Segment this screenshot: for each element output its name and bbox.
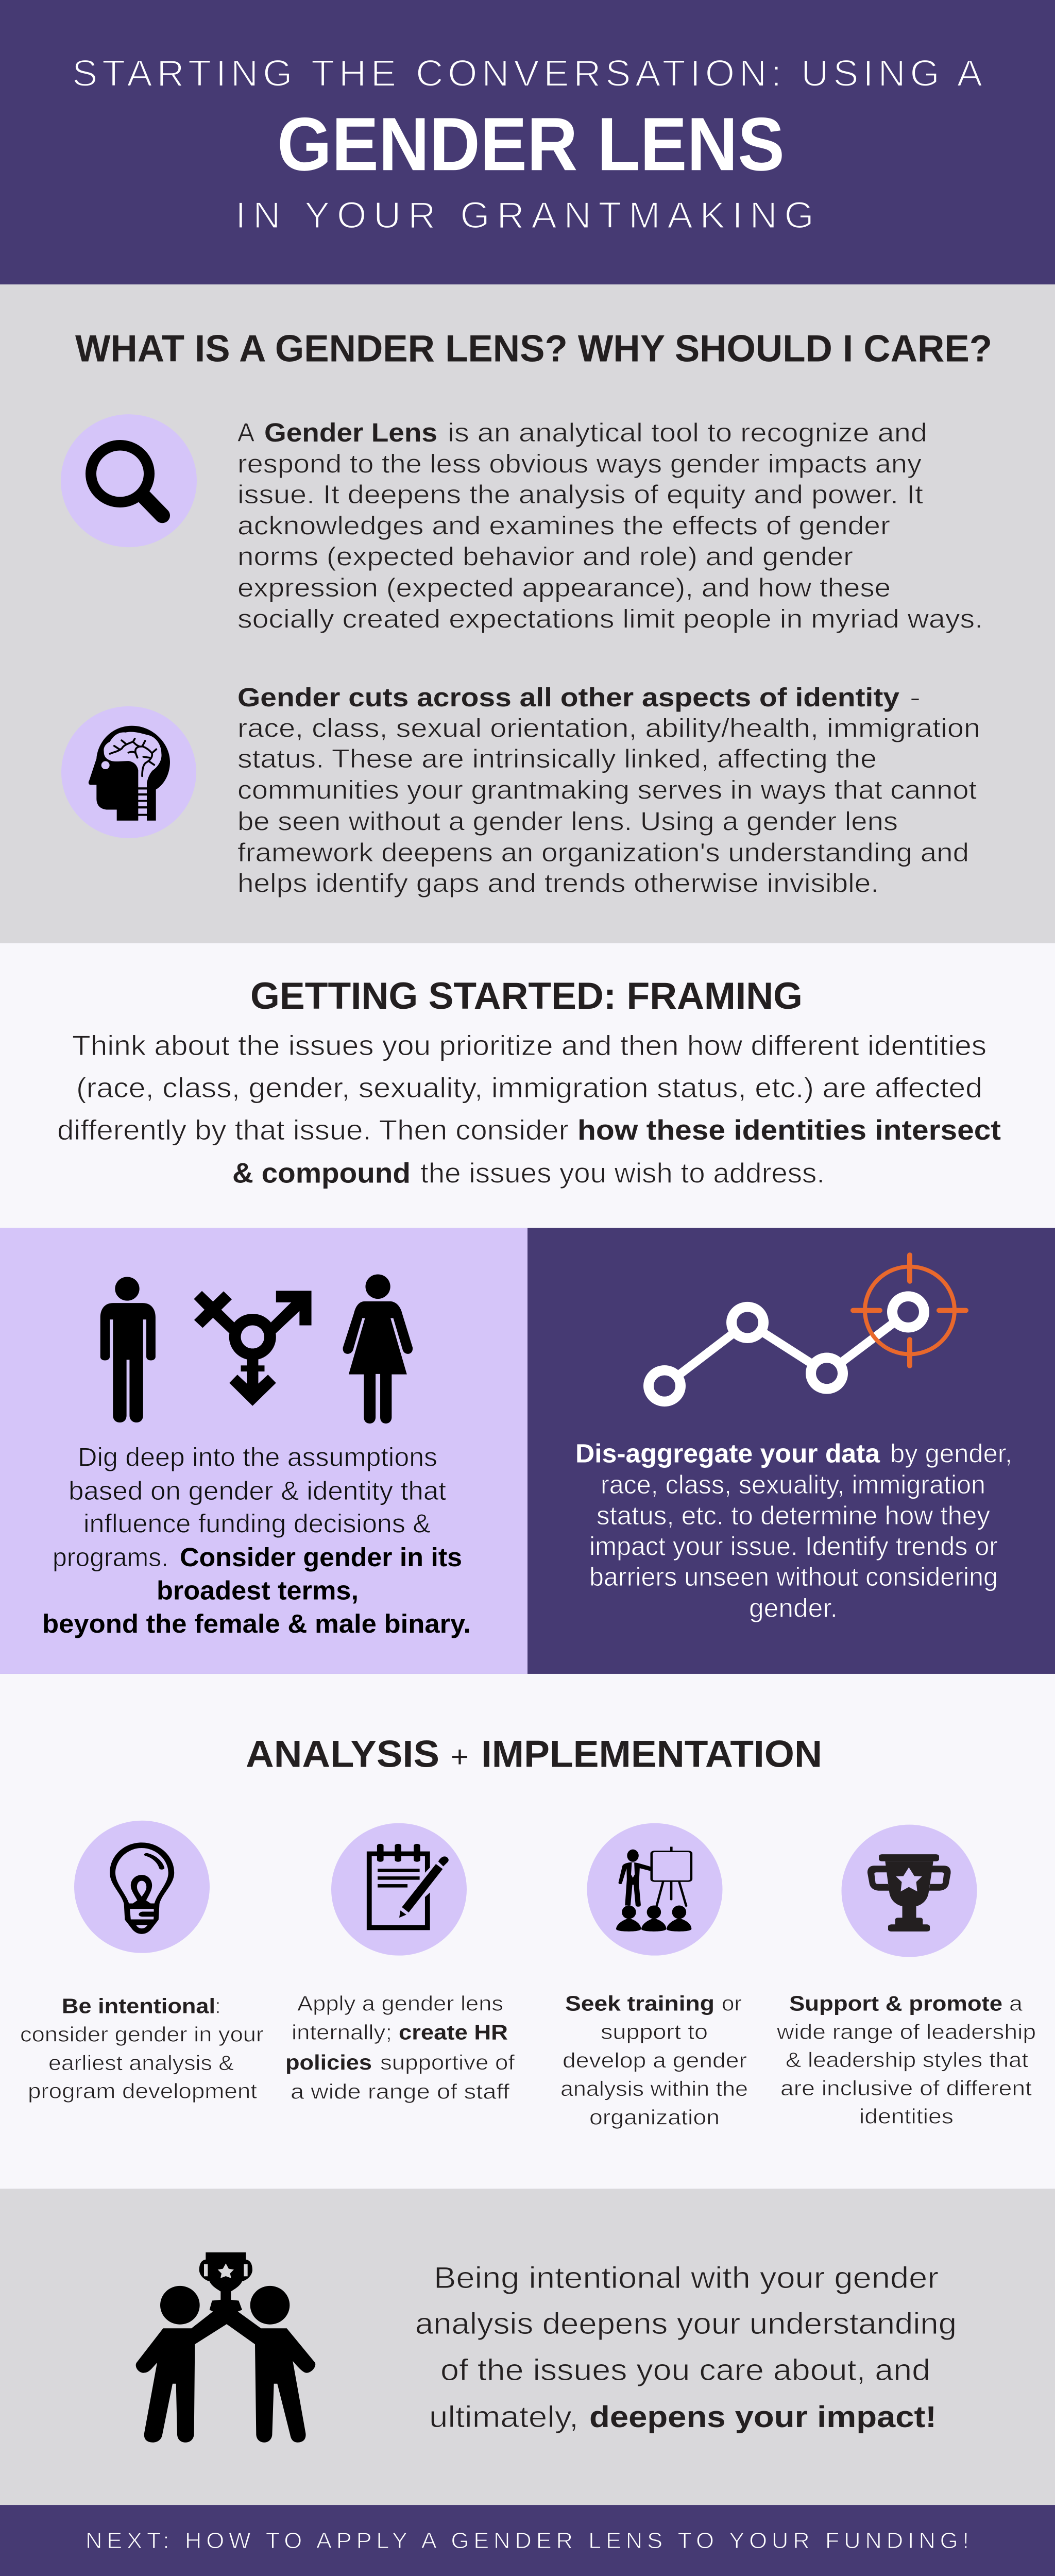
text block: seek training: organization [589,2105,720,2129]
text block: gender cuts across identity: race, class, sexual orientation, ability/health, immigration [237,713,980,742]
text block: dig deep into assumptions: based on gender & identity that [69,1476,446,1505]
text block: gender lens definition: issue. It deepens the analysis of equity and power. It [237,480,923,509]
text block: closing message: deepens your impact! [589,2399,937,2434]
text block: gender cuts across identity: Gender cuts across all other aspects of identity [237,682,899,712]
text block: dig deep into assumptions: beyond the female & male binary. [42,1608,471,1638]
text block: dig deep into assumptions: programs. [53,1542,168,1572]
text block: gender lens definition: is an analytical tool to recognize and [448,417,927,447]
text block: closing message: ultimately, [429,2399,578,2434]
panel: consider gender identity [0,1228,528,1674]
heading: analysis + implementation [246,1733,822,1775]
title line 3: IN YOUR GRANTMAKING [235,194,814,236]
text block: dis-aggregate data: impact your issue. Identify trends or [589,1531,998,1561]
icon: man, transgender symbol and woman [100,1274,413,1423]
text block: dig deep into assumptions: Dig deep into the assumptions [78,1442,437,1471]
panel: analysis and implementation [0,1674,1055,2189]
footer text: NEXT: HOW TO APPLY A GENDER LENS TO YOUR FUNDING! [86,2529,969,2553]
text block: gender cuts across identity [237,682,980,897]
text block: dis-aggregate data [575,1438,1012,1622]
text block: closing message: analysis deepens your understanding [415,2307,957,2341]
text block: framing guidance: differently by that issue. Then consider [57,1114,569,1146]
text block: gender lens definition: socially created expectations limit people in myriad ways. [237,604,983,633]
text block: support and promote: Support & promote [789,1991,1002,2015]
text block: be intentional: earliest analysis & [48,2050,234,2075]
text block: gender cuts across identity: helps identify gaps and trends otherwise invisible. [237,868,879,897]
text block: framing guidance: how these identities intersect [577,1114,1001,1146]
icon: trophy with star [842,1825,977,1957]
icon: light bulb [74,1821,210,1953]
text block: support and promote: wide range of leadership [776,2020,1036,2043]
panel: what is a gender lens [0,284,1055,943]
text block: seek training: develop a gender [563,2048,747,2072]
text block: gender lens definition [237,417,983,633]
text block: create hr policies: create HR [399,2020,508,2044]
text block: gender cuts across identity: communities your grantmaking serves in ways that cannot [237,775,977,805]
icon: head with brain [61,706,196,838]
text block: gender lens definition: respond to the less obvious ways gender impacts any [237,449,922,478]
text block: be intentional: program development [28,2079,257,2103]
text block: dis-aggregate data: status, etc. to determine how they [597,1500,990,1530]
text block: support and promote: a [1009,1991,1023,2015]
text block: gender cuts across identity: framework deepens an organization's understanding and [237,837,969,867]
text block: create hr policies: a wide range of staff [291,2079,510,2104]
text block: dig deep into assumptions: broadest terms, [157,1575,359,1605]
text block: dis-aggregate data: barriers unseen without considering [589,1562,998,1591]
text block: closing message: Being intentional with your gender [434,2261,939,2295]
panel: dis-aggregate your data [528,1228,1055,1674]
text block: gender lens definition: acknowledges and examines the effects of gender [237,511,890,540]
text block: seek training: or [722,1991,742,2015]
heading: getting started: GETTING STARTED: FRAMING [250,975,803,1017]
text block: framing guidance: the issues you wish to address. [420,1157,825,1189]
text block: dis-aggregate data: by gender, [890,1438,1012,1468]
text block: framing guidance: Think about the issues you prioritize and then how different identities [72,1030,986,1061]
text block: gender lens definition: norms (expected behavior and role) and gender [237,541,853,571]
icon: line chart with target [649,1255,966,1401]
heading: what is a gender lens: WHAT IS A GENDER LENS? WHY SHOULD I CARE? [75,327,992,369]
icon: notepad and pencil [331,1823,467,1956]
text block: framing guidance [57,1030,1001,1189]
icon: two people holding trophy [136,2252,315,2443]
text block: seek training: Seek training [565,1991,714,2015]
text block: dig deep into assumptions [42,1442,471,1638]
text block: support and promote [776,1991,1036,2128]
text block: dig deep into assumptions: influence funding decisions & [83,1509,431,1538]
text block: be intentional: Be intentional [62,1994,215,2018]
text block: create hr policies: policies [285,2050,372,2074]
text block: dis-aggregate data: Dis-aggregate your data [575,1438,880,1468]
text block: support and promote: are inclusive of different [780,2076,1032,2100]
icon: magnifying glass [61,414,197,547]
text block: seek training: analysis within the [560,2076,748,2100]
text block: create hr policies: internally; [292,2020,392,2044]
text block: gender cuts across identity: status. These are intrinsically linked, affecting the [237,744,877,773]
text block: be intentional [20,1994,264,2103]
title line 1: STARTING THE CONVERSATION: USING A [72,53,982,94]
text block: gender cuts across identity: be seen without a gender lens. Using a gender lens [237,806,898,836]
text block: create hr policies [285,1991,515,2104]
panel: deepens your impact [0,2189,1055,2505]
title main: gender lens: GENDER LENS [277,103,785,187]
text block: dis-aggregate data: gender. [749,1593,838,1622]
text block: gender lens definition: Gender Lens [264,417,437,447]
heading: analysis + implementation: ANALYSIS [246,1733,439,1775]
text block: framing guidance: & compound [232,1157,411,1189]
panel: getting started framing [0,943,1055,1228]
text block: support and promote: & leadership styles that [786,2048,1029,2072]
text block: be intentional: : [215,1994,220,2018]
text block: gender lens definition: A [237,417,255,447]
text block: create hr policies: Apply a gender lens [297,1991,503,2015]
heading: analysis + implementation: + [451,1739,469,1774]
text block: be intentional: consider gender in your [20,2022,264,2046]
text block: seek training: support to [601,2020,708,2043]
text block: seek training [560,1991,748,2129]
page header banner [0,0,1055,284]
icon: presenter with audience [587,1823,722,1956]
text block: gender lens definition: expression (expected appearance), and how these [237,572,891,602]
text block: support and promote: identities [859,2104,954,2128]
footer banner [0,2505,1055,2576]
text block: dig deep into assumptions: Consider gender in its [180,1542,462,1572]
heading: analysis + implementation: IMPLEMENTATION [481,1733,822,1775]
text block: closing message: of the issues you care about, and [440,2353,930,2387]
text block: gender cuts across identity: - [910,682,921,712]
text block: framing guidance: (race, class, gender, sexuality, immigration status, etc.) are affected [76,1072,982,1104]
text block: closing message [415,2261,957,2434]
text block: dis-aggregate data: race, class, sexuality, immigration [601,1470,985,1499]
text block: create hr policies: supportive of [380,2050,515,2074]
